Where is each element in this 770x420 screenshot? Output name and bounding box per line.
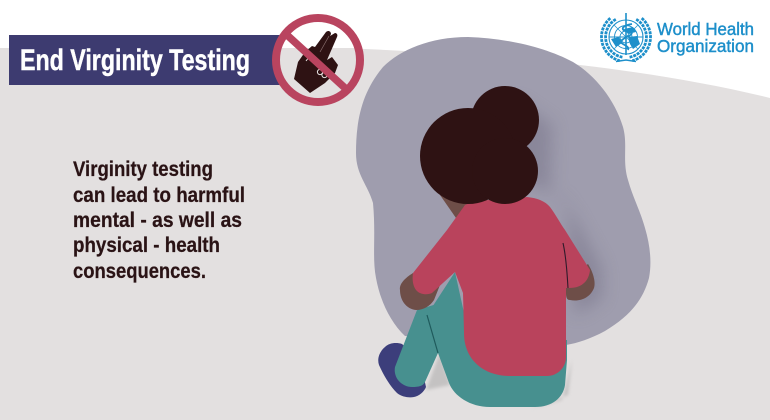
icon: prohibited hand sign bbox=[276, 18, 360, 102]
far leg bbox=[395, 300, 450, 387]
seated woman illustration bbox=[378, 86, 595, 409]
neck bbox=[440, 190, 472, 218]
pants bbox=[427, 272, 567, 407]
shoe bbox=[378, 343, 426, 397]
icon: hand with two raised fingers bbox=[294, 31, 338, 93]
grey-purple wall blob bbox=[356, 37, 650, 345]
sleeve crease bbox=[563, 243, 568, 288]
body text: consequences. bbox=[73, 259, 206, 283]
WHO logo: World Health bbox=[657, 19, 754, 39]
body text: mental - as well as bbox=[73, 208, 242, 232]
figure shadow on wall bbox=[527, 112, 606, 312]
arm skin right bbox=[566, 264, 595, 300]
shirt bbox=[413, 197, 590, 376]
WHO logo: Organization bbox=[657, 36, 754, 56]
icon: WHO emblem bbox=[601, 13, 651, 62]
leg crease bbox=[427, 315, 438, 353]
ground shadow bbox=[426, 352, 572, 409]
body text: physical - health bbox=[73, 233, 220, 257]
body text bbox=[73, 157, 245, 283]
arm skin left bbox=[400, 273, 440, 310]
WHO logo bbox=[601, 13, 754, 62]
body text: can lead to harmful bbox=[73, 183, 245, 207]
body text: Virginity testing bbox=[73, 157, 213, 181]
title banner: End Virginity Testing bbox=[20, 44, 250, 77]
title banner bbox=[9, 35, 285, 85]
hair bbox=[420, 86, 539, 204]
